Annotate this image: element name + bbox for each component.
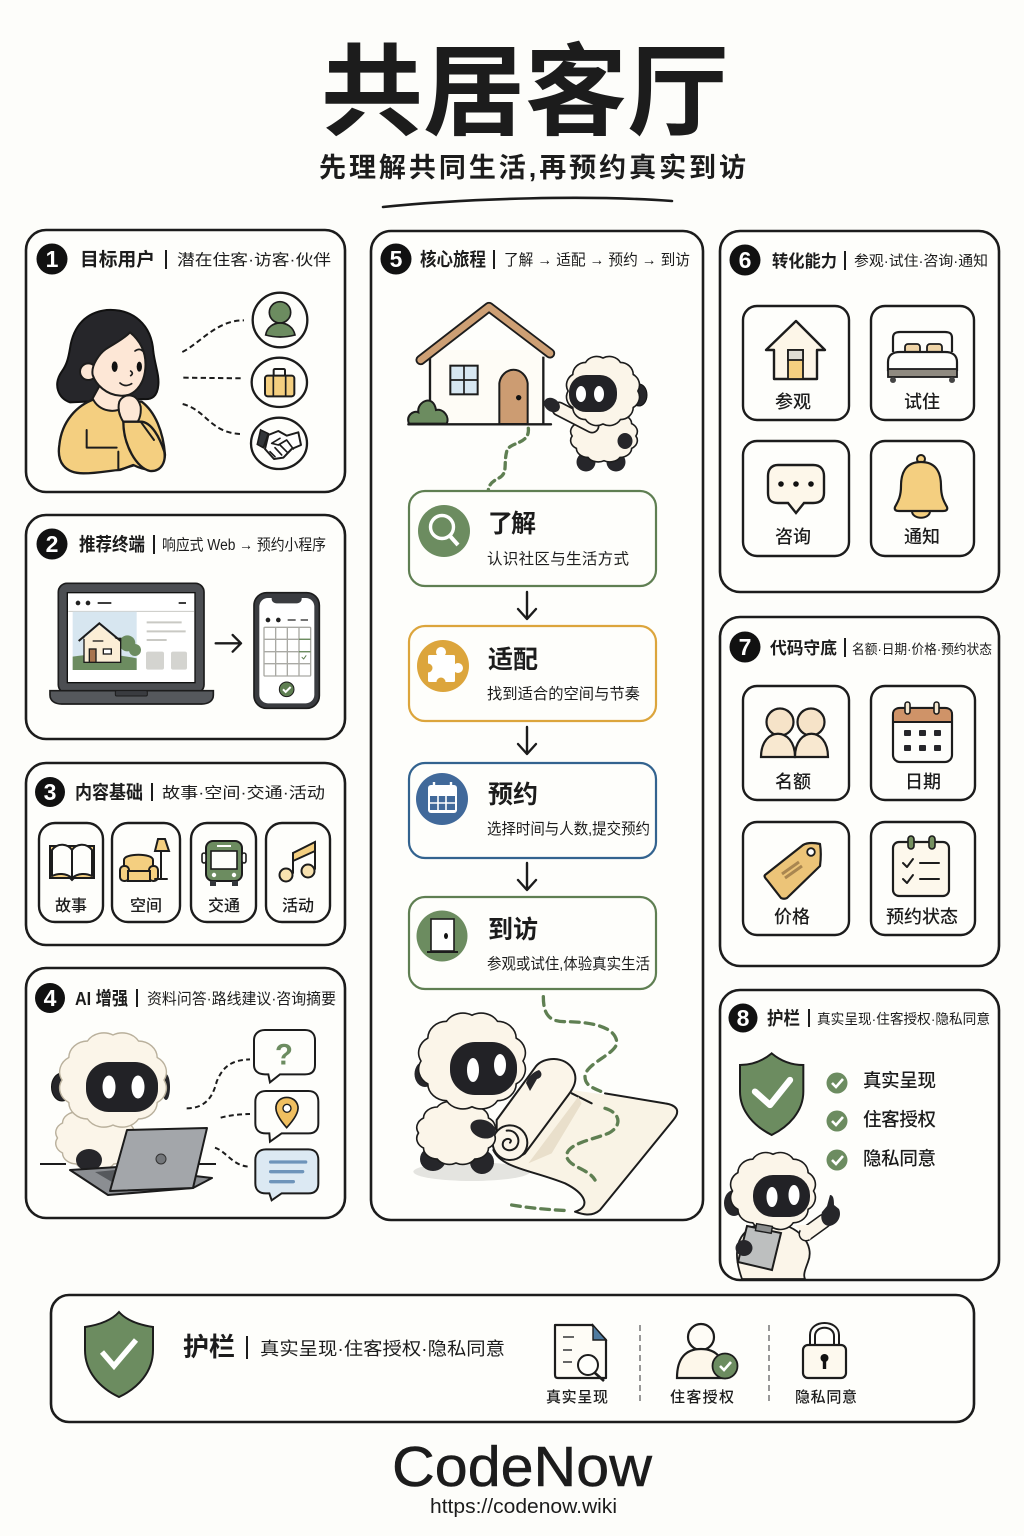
checklist: 住客授权 bbox=[863, 1109, 936, 1130]
item: privacy consent bbox=[795, 1323, 857, 1406]
panel 2 heading: 响应式 Web → 预约小程序 bbox=[162, 535, 326, 554]
icon: shield bbox=[740, 1053, 803, 1135]
panel 1 number badge bbox=[36, 244, 68, 274]
step: understand: 了解 bbox=[488, 510, 536, 538]
panel 7: code guarantees bbox=[720, 617, 999, 966]
card: quota: 名额 bbox=[775, 772, 811, 792]
panel 6 heading: 转化能力 bbox=[772, 251, 837, 271]
icon: calendar bbox=[416, 773, 468, 825]
icon: visitor suitcase bbox=[252, 358, 307, 407]
card: tour bbox=[743, 306, 849, 420]
panel 6 number badge: 6 bbox=[739, 247, 751, 273]
panel 6 number badge bbox=[730, 244, 760, 276]
step: book: 选择时间与人数,提交预约 bbox=[487, 820, 650, 838]
panel 6: conversion bbox=[720, 231, 999, 592]
illustration: phone with booking calendar bbox=[254, 593, 319, 708]
icon: door bbox=[416, 910, 468, 962]
card: booking status bbox=[871, 822, 975, 935]
card: notify: 通知 bbox=[904, 527, 940, 547]
checklist: 真实呈现 bbox=[863, 1070, 936, 1091]
checklist bbox=[826, 1070, 936, 1170]
panel 1 heading bbox=[80, 249, 331, 270]
panel 1 heading: 潜在住客·访客·伙伴 bbox=[177, 251, 331, 269]
icon: banner shield bbox=[85, 1312, 153, 1397]
title: 共居客厅 bbox=[321, 37, 729, 149]
panel 5 heading bbox=[420, 249, 690, 270]
card: transit bbox=[191, 823, 256, 922]
panel 3 heading: 故事·空间·交通·活动 bbox=[162, 784, 325, 802]
panel 3: content foundations bbox=[26, 763, 345, 945]
panel 7 heading: 代码守底 bbox=[770, 638, 837, 658]
step: book: 预约 bbox=[488, 781, 538, 809]
item: resident consent bbox=[670, 1324, 738, 1406]
panel 3 number badge bbox=[35, 777, 65, 807]
panel 3 number badge: 3 bbox=[44, 779, 56, 805]
panel 7 heading bbox=[770, 638, 992, 658]
panel 8 number badge: 8 bbox=[737, 1005, 750, 1031]
panel 1 number badge: 1 bbox=[46, 246, 59, 272]
bubble: summary bbox=[255, 1149, 318, 1200]
card: trial stay bbox=[871, 306, 974, 420]
step: understand: 认识社区与生活方式 bbox=[487, 550, 629, 568]
card: quota bbox=[743, 686, 849, 800]
card: date bbox=[871, 686, 975, 800]
illustration: laptop with web page bbox=[50, 583, 213, 704]
banner heading: 护栏 bbox=[183, 1332, 235, 1362]
sheep body and head bbox=[414, 1013, 541, 1178]
illustration: waving sheep bbox=[541, 356, 647, 472]
panel 5: core journey bbox=[371, 231, 703, 1220]
card: notify bbox=[871, 441, 974, 556]
step: visit: 到访 bbox=[488, 916, 538, 944]
item: truthful presentation bbox=[546, 1325, 608, 1406]
step: visit: 参观或试住,体验真实生活 bbox=[487, 955, 650, 973]
illustration: sheep with clipboard bbox=[724, 1153, 840, 1279]
item: truthful presentation: 真实呈现 bbox=[546, 1388, 608, 1406]
panel 1: target users bbox=[26, 230, 345, 492]
illustration: sheep with laptop bbox=[40, 1033, 216, 1195]
icon: partner handshake bbox=[251, 418, 307, 469]
dashed path from house bbox=[488, 428, 528, 490]
panel 2 number badge bbox=[36, 528, 68, 560]
panel 5 heading: 核心旅程 bbox=[420, 249, 486, 270]
step: book bbox=[409, 763, 656, 858]
step: fit: 适配 bbox=[488, 646, 538, 674]
illustration: house bbox=[408, 307, 551, 424]
card: story: 故事 bbox=[55, 897, 87, 915]
panel 7 heading: 名额·日期·价格·预约状态 bbox=[852, 642, 992, 657]
arrow down bbox=[518, 863, 536, 890]
panel 1 heading: 目标用户 bbox=[80, 249, 155, 270]
card: date: 日期 bbox=[905, 772, 941, 792]
card: events bbox=[266, 823, 330, 922]
card: price bbox=[743, 822, 849, 935]
card: space bbox=[112, 823, 180, 922]
banner heading bbox=[183, 1332, 505, 1362]
panel 8 heading bbox=[767, 1008, 990, 1029]
card: story bbox=[39, 823, 103, 922]
item: resident consent: 住客授权 bbox=[670, 1388, 734, 1406]
arrow: web to mini program bbox=[216, 635, 241, 652]
banner heading: 真实呈现·住客授权·隐私同意 bbox=[260, 1339, 505, 1359]
card: trial stay: 试住 bbox=[904, 392, 940, 412]
panel 4: AI enhancement bbox=[26, 968, 345, 1218]
panel 2 number badge: 2 bbox=[46, 531, 58, 557]
item: privacy consent: 隐私同意 bbox=[795, 1388, 857, 1406]
panel 2 heading bbox=[79, 534, 326, 555]
panel 4 number badge bbox=[35, 983, 65, 1013]
arrow down bbox=[518, 592, 536, 619]
panel 6 heading: 参观·试住·咨询·通知 bbox=[854, 253, 988, 270]
dashed route on the map bbox=[512, 997, 618, 1211]
panel 8 heading: 真实呈现·住客授权·隐私同意 bbox=[817, 1011, 990, 1027]
subtitle: 先理解共同生活,再预约真实到访 bbox=[319, 153, 746, 183]
card: transit: 交通 bbox=[208, 896, 240, 915]
divider bbox=[768, 1325, 770, 1403]
arrow down bbox=[518, 727, 536, 754]
panel 2: recommended terminals bbox=[26, 515, 345, 739]
illustration: sheep unrolling map bbox=[413, 1059, 677, 1214]
panel 3 heading: 内容基础 bbox=[75, 782, 143, 803]
card: booking status: 预约状态 bbox=[886, 907, 958, 927]
card: consult: 咨询 bbox=[775, 527, 811, 547]
step: visit bbox=[409, 897, 656, 989]
card: tour: 参观 bbox=[775, 392, 811, 412]
url: https://codenow.wiki bbox=[430, 1495, 617, 1518]
bubble: question bbox=[254, 1030, 315, 1082]
icon: resident bbox=[253, 293, 307, 347]
panel 3 heading bbox=[75, 782, 325, 803]
panel 2 heading: 推荐终端 bbox=[79, 534, 145, 555]
card: events: 活动 bbox=[282, 897, 314, 915]
panel 8 number badge bbox=[728, 1004, 758, 1032]
panel 4 heading bbox=[75, 988, 336, 1009]
panel 8: guardrails bbox=[720, 990, 999, 1280]
step: fit: 找到适合的空间与节奏 bbox=[487, 685, 640, 703]
bottom banner: guardrails bbox=[51, 1295, 974, 1422]
illustration: thinking woman bbox=[57, 310, 165, 473]
bubble: location bbox=[255, 1091, 318, 1142]
panel 8 heading: 护栏 bbox=[767, 1008, 800, 1029]
icon: puzzle bbox=[417, 640, 469, 692]
panel 7 number badge: 7 bbox=[739, 634, 751, 660]
step: understand bbox=[409, 491, 656, 586]
logo: CodeNow: CodeNow bbox=[392, 1435, 653, 1499]
checklist: 隐私同意 bbox=[863, 1148, 936, 1169]
step: fit bbox=[409, 626, 656, 721]
panel 4 number badge: 4 bbox=[44, 985, 57, 1011]
panel 6 heading bbox=[772, 251, 988, 271]
dashed connectors bbox=[187, 1059, 250, 1167]
dashed connectors bbox=[182, 320, 244, 434]
panel 5 number badge bbox=[380, 244, 412, 274]
panel 7 number badge bbox=[730, 632, 760, 662]
icon: magnifier bbox=[418, 505, 470, 557]
panel 5 number badge: 5 bbox=[390, 246, 403, 272]
panel 4 heading: 资料问答·路线建议·咨询摘要 bbox=[147, 990, 336, 1008]
panel 4 heading: AI 增强 bbox=[75, 988, 128, 1009]
card: price: 价格 bbox=[774, 907, 810, 927]
panel 5 heading: 了解 → 适配 → 预约 → 到访 bbox=[504, 251, 690, 269]
title underline bbox=[383, 198, 672, 207]
divider bbox=[639, 1325, 641, 1403]
card: consult bbox=[743, 441, 849, 556]
card: space: 空间 bbox=[130, 896, 162, 915]
bubble: question: ? bbox=[275, 1038, 293, 1071]
